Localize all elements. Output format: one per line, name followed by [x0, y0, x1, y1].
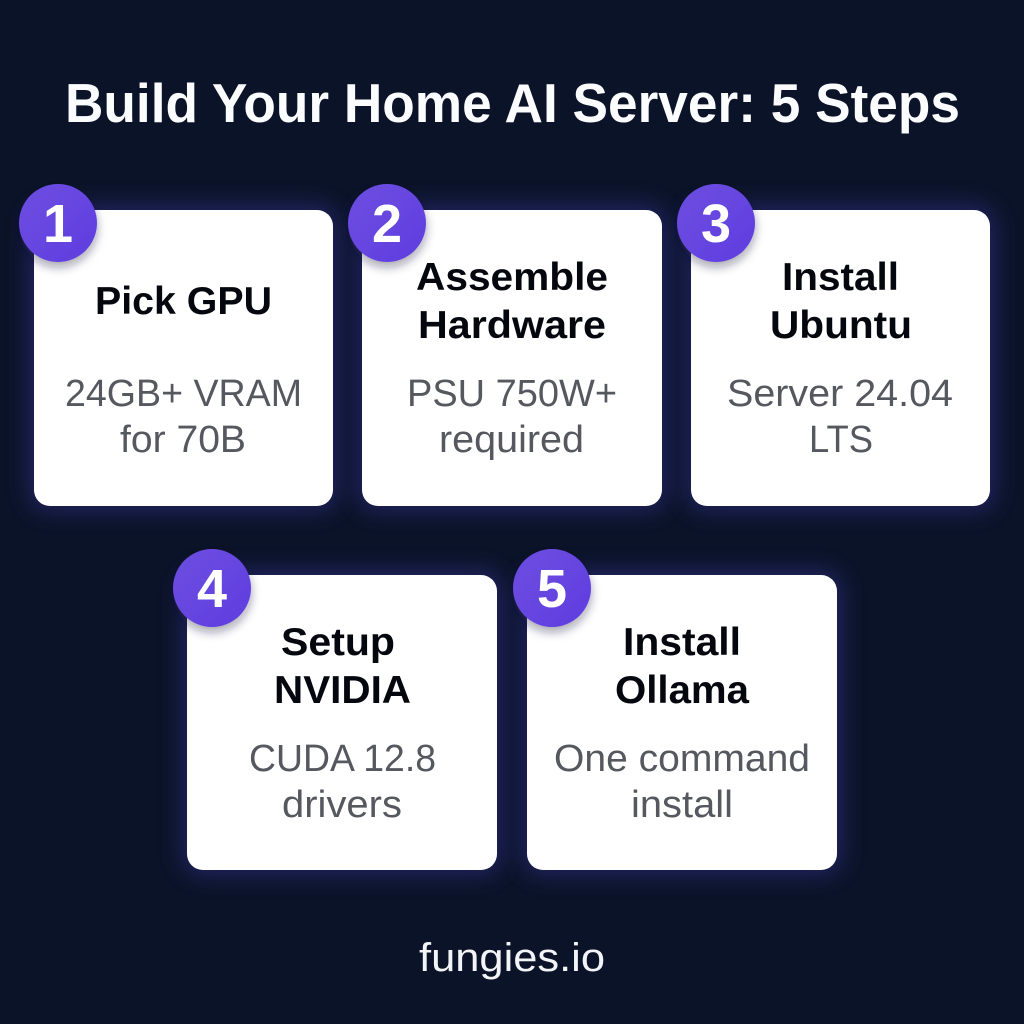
step 1 number badge: 1: [43, 194, 73, 254]
step 2 heading: Assemble: [416, 256, 608, 299]
step 2 heading: [416, 256, 608, 347]
step 2 heading: Hardware: [418, 304, 606, 347]
step 4 heading: NVIDIA: [274, 669, 411, 712]
panel: step 3 install ubuntu: [677, 184, 994, 510]
step 5 heading: [615, 621, 749, 712]
step 5 description: [554, 738, 810, 826]
step 5 description: install: [631, 784, 733, 826]
step 5 number badge: 5: [537, 559, 567, 619]
step 3 number badge: [677, 184, 755, 262]
step 3 heading: Install: [782, 256, 899, 299]
step 2 description: required: [439, 419, 584, 461]
step 4 heading: [274, 621, 411, 712]
step 3 description: Server 24.04: [727, 373, 953, 415]
step 2 description: [407, 373, 617, 461]
step 1 heading: Pick GPU: [95, 280, 272, 323]
step 4 description: [249, 738, 436, 826]
step 1 number badge: [19, 184, 97, 262]
step 4 number badge: 4: [197, 559, 227, 619]
step 4 heading: Setup: [281, 621, 395, 664]
panel: step 4 setup nvidia: [173, 549, 501, 874]
step 3 heading: [770, 256, 912, 347]
panel: step 1 pick GPU: [19, 184, 337, 510]
step 1 description: 24GB+ VRAM: [65, 373, 302, 415]
step 5 description: One command: [554, 738, 810, 780]
step 5 heading: Ollama: [615, 669, 749, 712]
step 4 description: CUDA 12.8: [249, 738, 436, 780]
step 1 description: for 70B: [120, 419, 246, 461]
step 3 description: LTS: [809, 419, 873, 461]
step 2 number badge: 2: [372, 194, 402, 254]
title: Build Your Home AI Server: 5 Steps: [65, 72, 960, 134]
step 4 number badge: [173, 549, 251, 627]
panel: step 5 install ollama: [513, 549, 841, 874]
step 3 heading: Ubuntu: [770, 304, 912, 347]
step 2 description: PSU 750W+: [407, 373, 617, 415]
footer brand: fungies.io: [419, 936, 605, 980]
step 2 number badge: [348, 184, 426, 262]
step 5 heading: Install: [623, 621, 741, 664]
step 5 number badge: [513, 549, 591, 627]
step 3 description: [727, 373, 953, 461]
step 1 description: [65, 373, 302, 461]
panel: step 2 assemble hardware: [348, 184, 666, 510]
step 3 number badge: 3: [701, 194, 731, 254]
step 4 description: drivers: [282, 784, 402, 826]
